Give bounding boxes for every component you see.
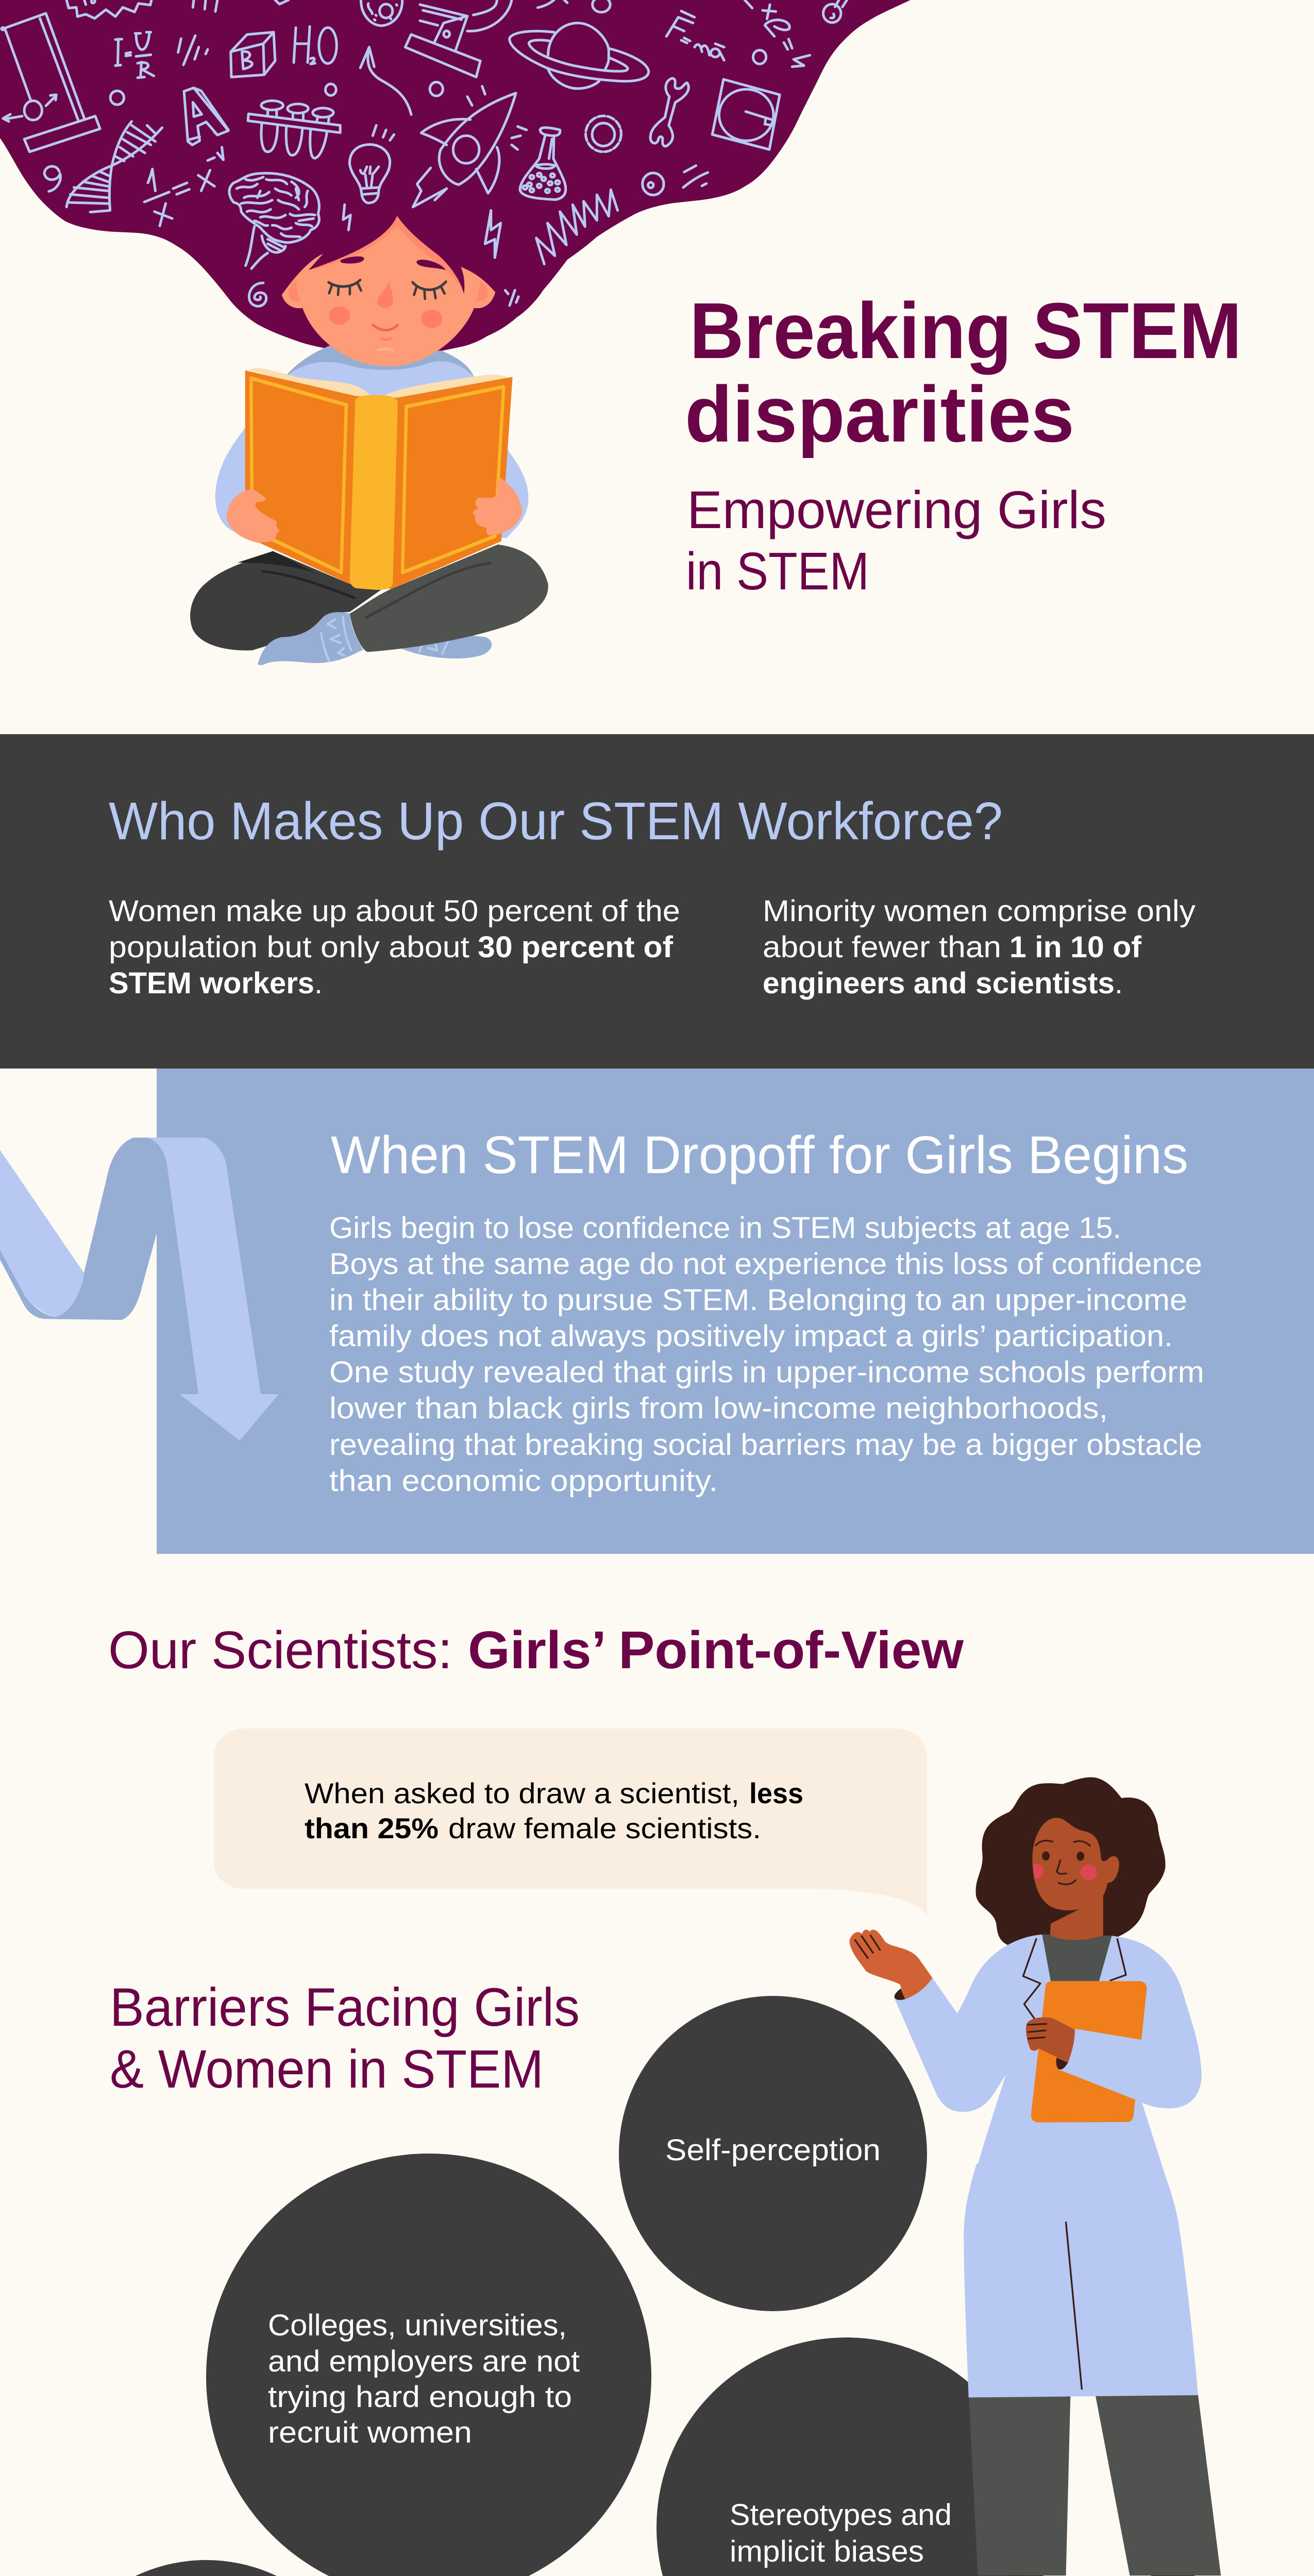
- subtitle: [686, 480, 1106, 601]
- callout: speech bubble: When asked to draw a scientist,: [305, 1777, 739, 1809]
- illustration: girl reading with STEM doodles in her hair: [0, 0, 911, 665]
- text block: One study revealed that girls in upper-income schools perform: [329, 1355, 1204, 1389]
- callout: speech bubble: less: [749, 1777, 803, 1809]
- circle: self-perception: [619, 1996, 927, 2311]
- heading: our scientists: Our Scientists:: [108, 1620, 452, 1680]
- heading: our scientists: Girls’ Point-of-View: [468, 1620, 964, 1680]
- main title: [685, 286, 1242, 459]
- text block: Girls begin to lose confidence in STEM subjects at age 15.: [329, 1211, 1121, 1245]
- circle: colleges and employers: recruit women: [268, 2416, 472, 2449]
- circle: stereotypes: [656, 2337, 1036, 2576]
- text block: than economic opportunity.: [329, 1464, 718, 1498]
- callout: speech bubble: [214, 1728, 927, 1919]
- text block: women share of STEM workers: [109, 894, 680, 1000]
- heading: When STEM Dropoff for Girls Begins: [331, 1125, 1188, 1184]
- circle: colleges and employers: trying hard enough to: [268, 2380, 572, 2414]
- icon: orange clipboard: [1031, 1981, 1147, 2123]
- text block: minority women: engineers and scientists: [763, 967, 1115, 1000]
- text block: minority women: Minority women comprise only: [763, 894, 1195, 928]
- text block: minority women: about fewer than: [763, 930, 1001, 964]
- heading: barriers facing girls and women: [110, 1977, 580, 2099]
- hair shape: [0, 0, 911, 351]
- circle: stereotypes: implicit biases: [730, 2535, 924, 2568]
- circle: colleges and employers: and employers are not: [268, 2345, 580, 2378]
- text block: minority women: [763, 894, 1195, 1000]
- text block: women share of STEM workers: population but only about: [109, 930, 469, 964]
- girl figure: [190, 216, 548, 665]
- title block: [685, 286, 1242, 601]
- main title: disparities: [685, 370, 1074, 459]
- text block: women share of STEM workers: STEM workers: [109, 967, 314, 1000]
- text block: lower than black girls from low-income neighborhoods,: [329, 1392, 1108, 1425]
- face: [282, 216, 495, 366]
- heading: barriers facing girls and women: Barriers Facing Girls: [110, 1977, 580, 2038]
- circle: growth mindsets: [38, 2560, 374, 2576]
- subtitle: Empowering Girls: [687, 480, 1106, 539]
- open book: [245, 368, 513, 590]
- main title: Breaking STEM: [689, 286, 1242, 375]
- icon: brain: [229, 173, 319, 268]
- illustration: scientist holding clipboard: [850, 1777, 1250, 2576]
- text block: Boys at the same age do not experience this loss of confidence: [329, 1247, 1202, 1281]
- circle: colleges and employers: [206, 2154, 651, 2576]
- icon: ribbon arrow pointing down: [0, 1138, 279, 1440]
- callout: speech bubble: draw female scientists.: [448, 1812, 761, 1844]
- heading: barriers facing girls and women: & Women in STEM: [110, 2039, 544, 2099]
- text block: revealing that breaking social barriers may be a bigger obstacle: [329, 1428, 1202, 1462]
- panel: barrier circles: [38, 1996, 1036, 2576]
- doodles: microscope and rocket: [405, 0, 527, 207]
- doodles: science and math icons, left half: [2, 0, 443, 306]
- heading: Who Makes Up Our STEM Workforce?: [109, 791, 1003, 851]
- heading: our scientists: [108, 1620, 964, 1680]
- doodles: science and math icons, right half: [485, 0, 847, 306]
- text block: [329, 1211, 1204, 1498]
- circle: colleges and employers: Colleges, universities,: [268, 2309, 567, 2342]
- callout: speech bubble: than 25%: [305, 1812, 439, 1844]
- subtitle: in STEM: [686, 541, 869, 601]
- circle: self-perception: Self-perception: [665, 2133, 881, 2167]
- text block: women share of STEM workers: .: [314, 967, 323, 1000]
- text block: women share of STEM workers: 30 percent of: [478, 930, 673, 964]
- scientist upper body: [850, 1777, 1202, 2216]
- panel: who makes up our STEM workforce: [0, 734, 1314, 1069]
- text block: minority women: .: [1115, 967, 1123, 1000]
- circle: stereotypes: Stereotypes and: [730, 2498, 952, 2532]
- text block: family does not always positively impact a girls’ participation.: [329, 1319, 1173, 1353]
- text block: women share of STEM workers: Women make up about 50 percent of the: [109, 894, 680, 928]
- text block: in their ability to pursue STEM. Belonging to an upper-income: [329, 1283, 1187, 1317]
- scientist lower body: [951, 2164, 1250, 2576]
- text block: minority women: 1 in 10 of: [1009, 930, 1142, 964]
- panel: when STEM dropoff begins: [0, 1069, 1314, 1554]
